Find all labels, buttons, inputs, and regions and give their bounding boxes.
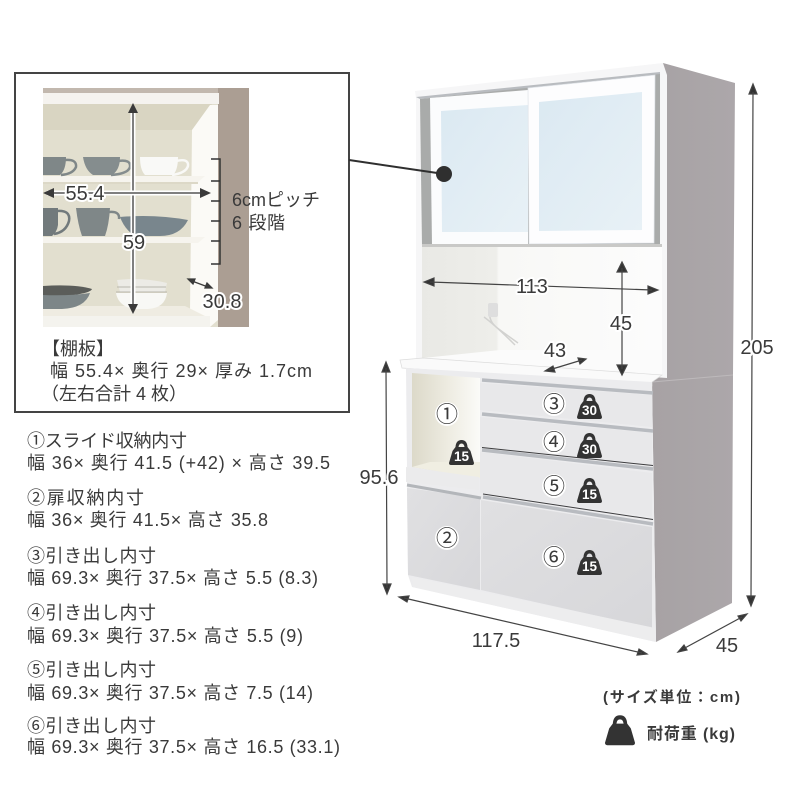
drawer 6 [481, 500, 652, 628]
connector: photo to door [349, 160, 452, 182]
open niche [422, 244, 662, 375]
left sliding door [430, 90, 528, 245]
icon: weight 15 slide: 15 [454, 449, 469, 464]
icon: weight 15 drawer 6 [577, 550, 602, 575]
spec 4 [27, 603, 303, 646]
cups upper shelf [43, 157, 66, 175]
label: 113: 113 [516, 276, 548, 298]
label: shelf pitch: 6cmピッチ [232, 190, 320, 210]
spec 1: 幅 36× 奥行 41.5 (+42) × 高さ 39.5 [27, 453, 330, 473]
arrow: niche height 45 [617, 262, 627, 375]
arrow: width 117.5 [399, 596, 647, 655]
icon: weight 30 drawer 3 [577, 394, 602, 419]
counter top [400, 358, 662, 386]
numbered markers [435, 392, 566, 570]
icon: weight 15 drawer 5 [577, 478, 602, 503]
drawer rails [482, 380, 653, 524]
label: 95.6: 95.6 [360, 467, 398, 489]
photo: cabinet interior with dishes [43, 88, 249, 327]
spec 6: 幅 69.3× 奥行 37.5× 高さ 16.5 (33.1) [27, 737, 340, 757]
cabinet side face [652, 63, 735, 642]
bracket: shelf pitch [211, 159, 220, 264]
power outlet and cord [484, 312, 518, 345]
arrow: depth 45 [678, 614, 747, 652]
spec list [27, 431, 340, 757]
right sliding door [528, 75, 655, 244]
drawer 3 [480, 383, 652, 427]
label: 117.5: 117.5 [472, 630, 520, 652]
shelf board heading: 【棚板】 [42, 339, 114, 359]
drawer 5 [480, 452, 652, 517]
spec 5: 幅 69.3× 奥行 37.5× 高さ 7.5 (14) [27, 683, 313, 703]
arrow: height 59 [128, 103, 138, 314]
spec 4: 幅 69.3× 奥行 37.5× 高さ 5.5 (9) [27, 626, 303, 646]
shelf board count: （左右合計 4 枚） [41, 384, 187, 404]
panel: shelf detail [15, 73, 349, 412]
marker 5: ⑤ [543, 474, 565, 499]
label: niche height 45: 45 [610, 313, 632, 335]
plinth [412, 577, 656, 642]
marker 6: ⑥ [543, 545, 565, 570]
label: 30.8: 30.8 [203, 291, 241, 313]
left glass [441, 105, 528, 232]
arrow: total height 205 [747, 84, 757, 606]
slide storage opening [412, 373, 480, 478]
lower frame [406, 368, 656, 642]
marker 1: ① [436, 402, 458, 427]
arrow: lower height 95.6 [382, 362, 391, 594]
side seam [652, 375, 733, 382]
slide shelf front [406, 467, 479, 490]
arrow: niche width 113 [424, 278, 658, 294]
cabinet illustration [400, 63, 735, 642]
cups middle shelf [43, 208, 58, 236]
panel frame [15, 73, 349, 412]
door recess [420, 74, 660, 246]
right glass [539, 92, 642, 231]
label: depth 45: 45 [716, 635, 738, 657]
label: 55.4: 55.4 [66, 183, 104, 205]
spec 1 [27, 431, 330, 473]
icon: weight 30 drawer 4: 30 [582, 442, 597, 457]
label: 59: 59 [123, 232, 145, 254]
spec 5 [27, 660, 313, 703]
bowls bottom shelf [43, 285, 92, 296]
label: shelf steps: 6 段階 [232, 213, 285, 233]
icon: weight 30 drawer 4 [577, 433, 602, 458]
icon: load bag [605, 715, 635, 745]
drawer 4 [480, 417, 652, 465]
icon: weight 15 drawer 6: 15 [582, 559, 597, 574]
icon: weight 15 slide [449, 440, 474, 465]
marker 3: ③ [543, 392, 565, 417]
load label: 耐荷重 (kg) [647, 725, 735, 743]
size unit note: (サイズ単位：cm) [603, 688, 740, 706]
label: niche depth 43: 43 [544, 340, 566, 362]
spec 2 [27, 488, 268, 530]
spec 6 [27, 716, 340, 757]
load weight icons [449, 394, 602, 575]
spec 6: ⑥引き出し内寸 [27, 716, 156, 736]
shelf board size: 幅 55.4× 奥行 29× 厚み 1.7cm [50, 361, 312, 381]
spec 2: 幅 36× 奥行 41.5× 高さ 35.8 [27, 510, 268, 530]
cornice edge [416, 72, 660, 99]
arrow: depth 30.8 [188, 279, 212, 288]
upper frame [415, 63, 667, 378]
label: 205: 205 [740, 337, 774, 359]
marker 2: ② [436, 526, 458, 551]
arrow: width 55.4 [43, 188, 211, 198]
door 2 rail [407, 485, 481, 498]
spec 4: ④引き出し内寸 [27, 603, 156, 623]
arrow: niche depth 43 [545, 358, 586, 372]
spec 1: ①スライド収納内寸 [27, 431, 187, 451]
spec 2: ②扉収納内寸 [27, 488, 144, 508]
icon: weight 30 drawer 3: 30 [582, 403, 597, 418]
spec 5: ⑤引き出し内寸 [27, 660, 156, 680]
spec 3 [27, 546, 318, 588]
door 2 [407, 488, 480, 590]
legend [603, 688, 740, 745]
spec 3: 幅 69.3× 奥行 37.5× 高さ 5.5 (8.3) [27, 568, 318, 588]
icon: weight 15 drawer 5: 15 [582, 487, 597, 502]
marker 4: ④ [543, 430, 565, 455]
spec 3: ③引き出し内寸 [27, 546, 156, 566]
